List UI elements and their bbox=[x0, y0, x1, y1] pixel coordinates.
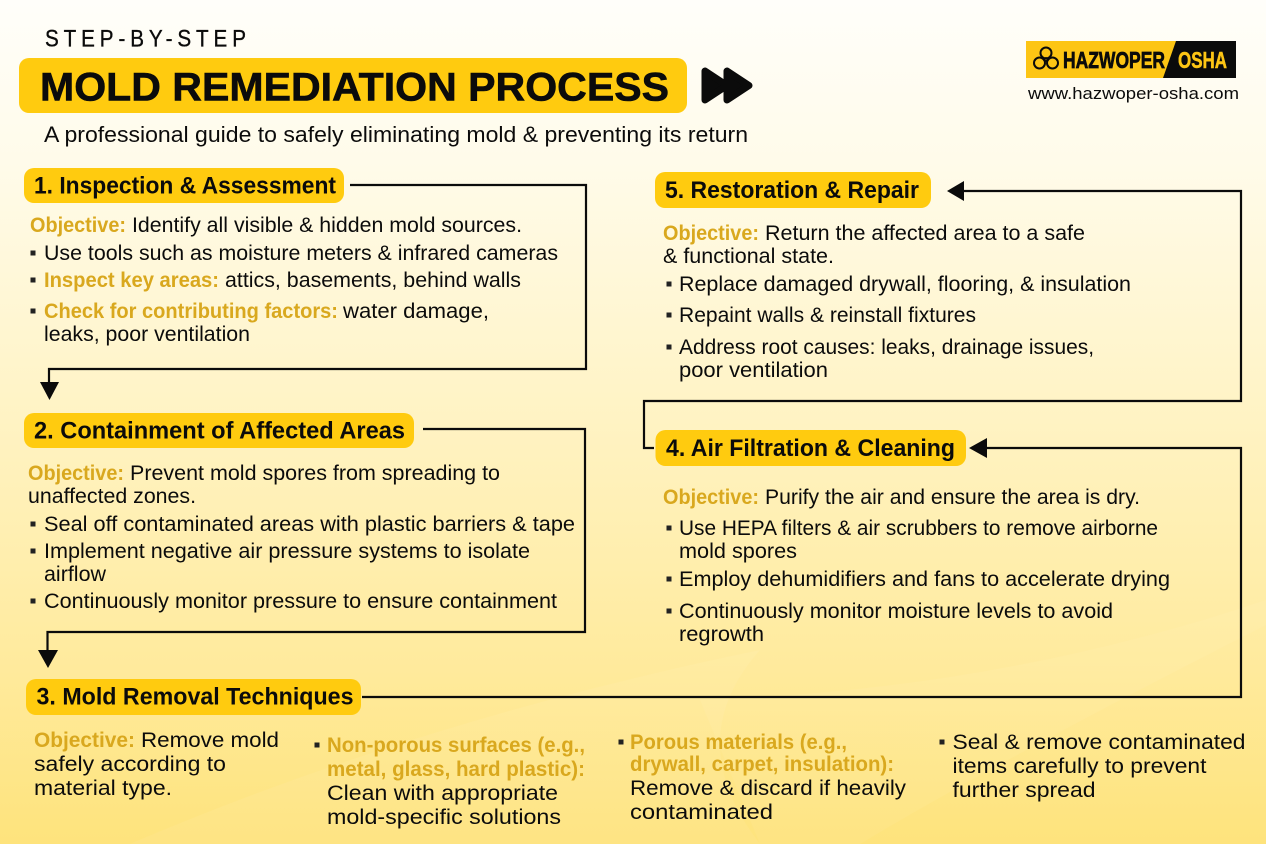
step 4 bullet list: Use HEPA filters & air scrubbers to remove airborne bbox=[679, 517, 1158, 540]
step 3 objective: material type. bbox=[34, 777, 172, 800]
step 1 bullet list: attics, basements, behind walls bbox=[225, 269, 521, 292]
step 3 porous materials bbox=[618, 731, 907, 824]
step 5 bullet list: poor ventilation bbox=[679, 359, 828, 382]
step 5 bullet list: Repaint walls & reinstall fixtures bbox=[679, 304, 976, 327]
step 2 objective bbox=[28, 462, 500, 508]
step 5 heading: 5. Restoration & Repair bbox=[665, 177, 919, 204]
step 3 porous materials: contaminated bbox=[630, 801, 773, 824]
step 3 seal and remove: Seal & remove contaminated bbox=[952, 731, 1246, 754]
step 3 seal and remove bbox=[940, 731, 1246, 802]
step 5 objective: Return the affected area to a safe bbox=[765, 222, 1085, 245]
step 5 bullet list: Address root causes: leaks, drainage issues, bbox=[679, 336, 1094, 359]
step 5 objective: Objective: bbox=[663, 222, 759, 245]
step 3 non-porous surfaces: Non-porous surfaces (e.g., bbox=[327, 734, 585, 757]
step 1 objective: Identify all visible & hidden mold sources. bbox=[132, 214, 522, 237]
step 4 objective: Purify the air and ensure the area is dry. bbox=[765, 486, 1140, 509]
arrow: step 4 to step 5 bbox=[644, 181, 1241, 448]
step 4 bullet list: regrowth bbox=[679, 623, 764, 646]
step 1 bullet list: water damage, bbox=[342, 300, 489, 323]
subtitle: A professional guide to safely eliminating mold & preventing its return bbox=[44, 122, 748, 147]
step 3 non-porous surfaces: mold-specific solutions bbox=[327, 806, 561, 829]
step 4 bullet list: Employ dehumidifiers and fans to accelerate drying bbox=[679, 568, 1170, 591]
step 2 bullet list: Implement negative air pressure systems to isolate bbox=[44, 540, 530, 563]
icon: fast-forward arrows bbox=[705, 71, 749, 100]
step 1 bullet list bbox=[30, 242, 558, 346]
step 2 objective: Prevent mold spores from spreading to bbox=[130, 462, 500, 485]
panel: step 2 containment bbox=[24, 413, 575, 613]
step 2 objective: unaffected zones. bbox=[28, 485, 196, 508]
step 1 heading: 1. Inspection & Assessment bbox=[34, 172, 336, 200]
panel: step 4 air filtration bbox=[656, 430, 1170, 646]
step 4 bullet list: mold spores bbox=[679, 540, 797, 563]
step 3 porous materials: Porous materials (e.g., bbox=[630, 731, 847, 754]
step 3 porous materials: Remove & discard if heavily bbox=[630, 777, 907, 800]
step 3 objective: safely according to bbox=[34, 753, 226, 776]
small heading: step-by-step: STEP-BY-STEP bbox=[45, 25, 246, 52]
title banner: MOLD REMEDIATION PROCESS bbox=[40, 66, 669, 110]
step 1 objective: Objective: bbox=[30, 214, 126, 237]
logo: HAZWOPER OSHA: HAZWOPER bbox=[1063, 47, 1165, 73]
logo: HAZWOPER OSHA: OSHA bbox=[1178, 47, 1227, 73]
step 1 bullet list: Inspect key areas: bbox=[44, 269, 219, 292]
step 5 objective bbox=[663, 222, 1085, 268]
step 1 bullet list: Use tools such as moisture meters & infrared cameras bbox=[44, 242, 558, 265]
logo: HAZWOPER OSHA bbox=[1026, 41, 1236, 78]
step 1 bullet list: Check for contributing factors: bbox=[44, 300, 338, 323]
arrow: step 2 to step 3 bbox=[38, 429, 585, 668]
step 3 non-porous surfaces: Clean with appropriate bbox=[327, 782, 558, 805]
step 4 heading: 4. Air Filtration & Cleaning bbox=[666, 435, 955, 462]
step 5 objective: & functional state. bbox=[663, 245, 834, 268]
step 3 non-porous surfaces: metal, glass, hard plastic): bbox=[327, 758, 585, 781]
step 4 bullet list: Continuously monitor moisture levels to avoid bbox=[679, 600, 1113, 623]
step 2 bullet list bbox=[30, 513, 575, 613]
step 4 bullet list bbox=[666, 517, 1170, 646]
step 3 seal and remove: further spread bbox=[952, 779, 1096, 802]
arrow: step 1 to step 2 bbox=[40, 185, 586, 400]
panel: step 5 restoration bbox=[655, 172, 1131, 382]
step 2 objective: Objective: bbox=[28, 462, 124, 485]
step 4 objective: Objective: bbox=[663, 486, 759, 509]
website url: www.hazwoper-osha.com bbox=[1027, 85, 1239, 103]
step 3 porous materials: drywall, carpet, insulation): bbox=[630, 753, 894, 776]
step 2 bullet list: airflow bbox=[44, 563, 107, 586]
step 3 objective bbox=[34, 729, 279, 800]
panel: step 1 inspection bbox=[24, 168, 558, 346]
step 5 bullet list bbox=[666, 273, 1131, 382]
step 1 bullet list: leaks, poor ventilation bbox=[44, 323, 250, 346]
step 2 bullet list: Continuously monitor pressure to ensure containment bbox=[44, 590, 557, 613]
panel: step 3 mold removal bbox=[26, 679, 1246, 829]
step 3 heading: 3. Mold Removal Techniques bbox=[36, 684, 354, 710]
step 2 bullet list: Seal off contaminated areas with plastic barriers & tape bbox=[44, 513, 575, 536]
step 2 heading: 2. Containment of Affected Areas bbox=[34, 418, 405, 444]
step 3 objective: Remove mold bbox=[141, 729, 279, 752]
arrow: step 3 to step 4 bbox=[362, 438, 1241, 697]
step 5 bullet list: Replace damaged drywall, flooring, & insulation bbox=[679, 273, 1131, 296]
step 3 non-porous surfaces bbox=[314, 734, 585, 829]
step 3 objective: Objective: bbox=[34, 729, 135, 752]
step 3 seal and remove: items carefully to prevent bbox=[952, 755, 1207, 778]
